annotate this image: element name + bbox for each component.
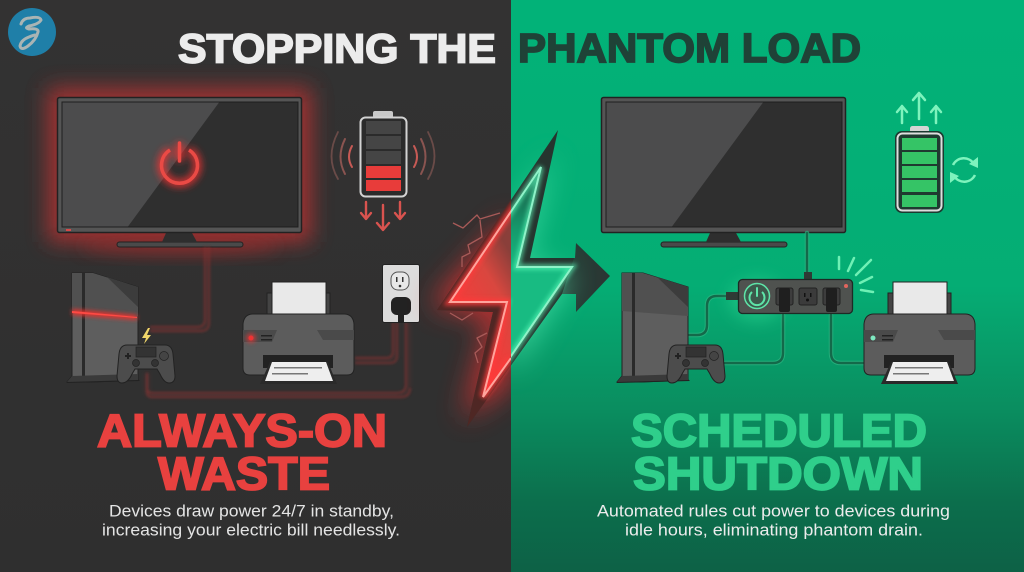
text: scheduled description xyxy=(597,502,950,540)
icon: yellow bolt xyxy=(142,328,151,344)
panel: scheduled background xyxy=(511,0,1024,572)
left printer xyxy=(243,282,354,384)
text: scheduled description: idle hours, eliminating phantom drain. xyxy=(625,522,923,540)
electric crackles xyxy=(450,213,500,363)
right tv xyxy=(602,98,846,247)
left cords xyxy=(147,247,410,397)
text: always-on description: Devices draw power 24/7 in standby, xyxy=(109,502,394,520)
heading: scheduled shutdown: SCHEDULED xyxy=(631,404,927,456)
text: always-on description xyxy=(102,502,400,540)
right printer xyxy=(864,282,975,384)
left game console xyxy=(67,273,140,383)
title xyxy=(178,25,861,72)
left tv with red glow xyxy=(48,88,311,256)
title: STOPPING THE xyxy=(178,26,496,72)
heading: scheduled shutdown: SHUTDOWN xyxy=(633,448,923,500)
icon: standby power symbol xyxy=(161,143,198,183)
logo badge xyxy=(8,8,56,56)
smart power strip xyxy=(726,272,852,322)
wall outlet xyxy=(382,264,420,322)
heading: scheduled shutdown xyxy=(631,404,927,500)
activity sparks xyxy=(839,257,873,292)
panel: always-on background xyxy=(0,0,511,572)
heading: always-on waste xyxy=(97,404,387,500)
icon: draining battery xyxy=(332,111,434,230)
right controller xyxy=(667,345,725,383)
text: scheduled description: Automated rules cut power to devices during xyxy=(597,502,950,520)
right cords xyxy=(688,233,864,363)
icon: full battery xyxy=(895,93,944,213)
right game console xyxy=(617,273,690,383)
lightning bolt xyxy=(430,130,574,427)
left controller xyxy=(117,345,175,383)
title: PHANTOM LOAD xyxy=(518,25,861,71)
icon: refresh arrows xyxy=(950,157,978,183)
heading: always-on waste: WASTE xyxy=(158,448,330,500)
text: always-on description: increasing your electric bill needlessly. xyxy=(102,522,400,540)
heading: always-on waste: ALWAYS-ON xyxy=(97,404,387,456)
arrow xyxy=(530,243,610,312)
